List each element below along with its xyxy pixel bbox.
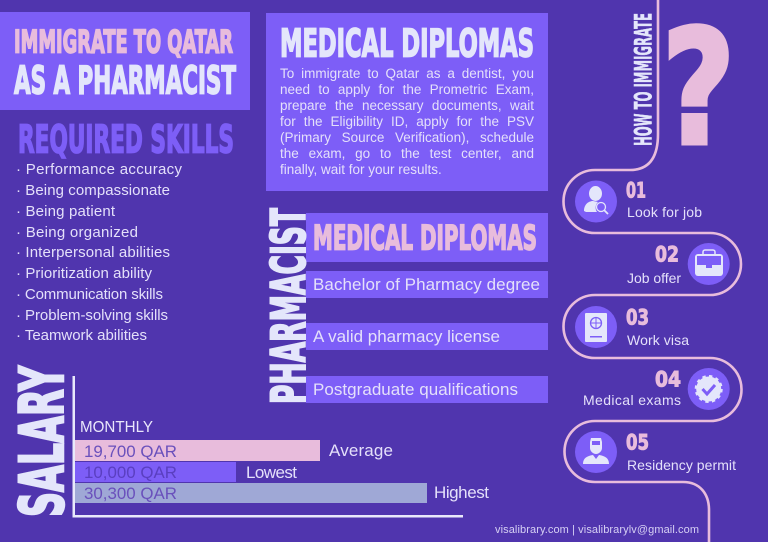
step 02: 02 xyxy=(655,242,679,266)
step 05 xyxy=(575,430,736,473)
winding path xyxy=(564,0,742,542)
paragraph: immigration process: To immigrate to Qatar as a dentist, you xyxy=(280,66,534,81)
title line 1: IMMIGRATE TO QATAR xyxy=(14,24,233,60)
paragraph: immigration process: for the Eligibility ID, apply for the PSV xyxy=(280,114,534,129)
panel: title xyxy=(0,12,250,110)
label: monthly: MONTHLY xyxy=(80,419,153,436)
step 04: 04 xyxy=(655,368,681,392)
skills list: · Problem-solving skills xyxy=(16,307,168,324)
title line 2: AS A PHARMACIST xyxy=(14,58,236,102)
step 02: Job offer xyxy=(627,270,681,286)
chart: salary bars xyxy=(72,376,489,518)
heading: required skills: REQUIRED SKILLS xyxy=(18,118,234,162)
icon: person search xyxy=(584,186,608,214)
heading: MEDICAL DIPLOMAS xyxy=(313,218,537,258)
step 03: Work visa xyxy=(627,332,689,348)
bar: highest xyxy=(75,483,489,503)
rotated label: PHARMACIST xyxy=(262,208,317,404)
skills list xyxy=(16,161,182,344)
bar: highest: Highest xyxy=(434,483,489,502)
icon: check badge xyxy=(696,376,722,402)
heading: MEDICAL DIPLOMAS xyxy=(280,22,534,66)
paragraph: immigration process: the exam, go to the test center, and xyxy=(280,146,534,161)
diploma items: A valid pharmacy license xyxy=(313,327,500,346)
bar: lowest xyxy=(75,462,297,482)
panel: medical diplomas intro xyxy=(266,13,548,191)
icon: doctor xyxy=(583,438,609,464)
paragraph: immigration process: (Primary Source Verification), schedule xyxy=(280,130,534,145)
bar: average: Average xyxy=(329,441,393,460)
paragraph: immigration process: need to apply for the Prometric Exam, xyxy=(280,82,534,97)
step 01: Look for job xyxy=(627,204,702,220)
heading: salary: SALARY xyxy=(7,366,78,517)
step 01: 01 xyxy=(626,178,646,202)
skills list: · Teamwork abilities xyxy=(16,327,147,344)
skills list: · Being compassionate xyxy=(16,182,170,199)
step 03: 03 xyxy=(626,306,649,330)
step 04 xyxy=(583,368,730,410)
bar: average xyxy=(75,440,393,461)
icon: briefcase xyxy=(695,250,723,276)
step 05: Residency permit xyxy=(627,457,736,473)
diploma items: Bachelor of Pharmacy degree xyxy=(313,275,540,294)
skills list: · Interpersonal abilities xyxy=(16,244,170,261)
bar: average: 19,700 QAR xyxy=(84,442,177,461)
paragraph: immigration process xyxy=(280,66,534,177)
step 03 xyxy=(575,306,689,348)
bar: lowest: 10,000 QAR xyxy=(84,463,177,482)
step 01 xyxy=(575,178,702,222)
diploma items: Postgraduate qualifications xyxy=(313,380,518,399)
step 02 xyxy=(627,242,730,286)
step 05: 05 xyxy=(626,430,649,454)
skills list: · Being patient xyxy=(16,203,116,220)
icon: passport xyxy=(585,313,607,342)
skills list: · Being organized xyxy=(16,224,138,241)
question mark: ? xyxy=(662,0,735,181)
footer contact: visalibrary.com | visalibrarylv@gmail.com xyxy=(495,524,699,536)
panel: pharmacist diplomas xyxy=(262,208,548,404)
paragraph: immigration process: prepare the necessary documents, wait xyxy=(280,98,534,113)
step 04: Medical exams xyxy=(583,392,681,408)
skills list: · Performance accuracy xyxy=(16,161,182,178)
skills list: · Communication skills xyxy=(16,286,163,303)
diploma items xyxy=(313,275,540,399)
paragraph: immigration process: finally, wait for your results. xyxy=(280,162,442,177)
skills list: · Prioritization ability xyxy=(16,265,152,282)
bar: highest: 30,300 QAR xyxy=(84,484,177,503)
bar: lowest: Lowest xyxy=(246,463,297,482)
